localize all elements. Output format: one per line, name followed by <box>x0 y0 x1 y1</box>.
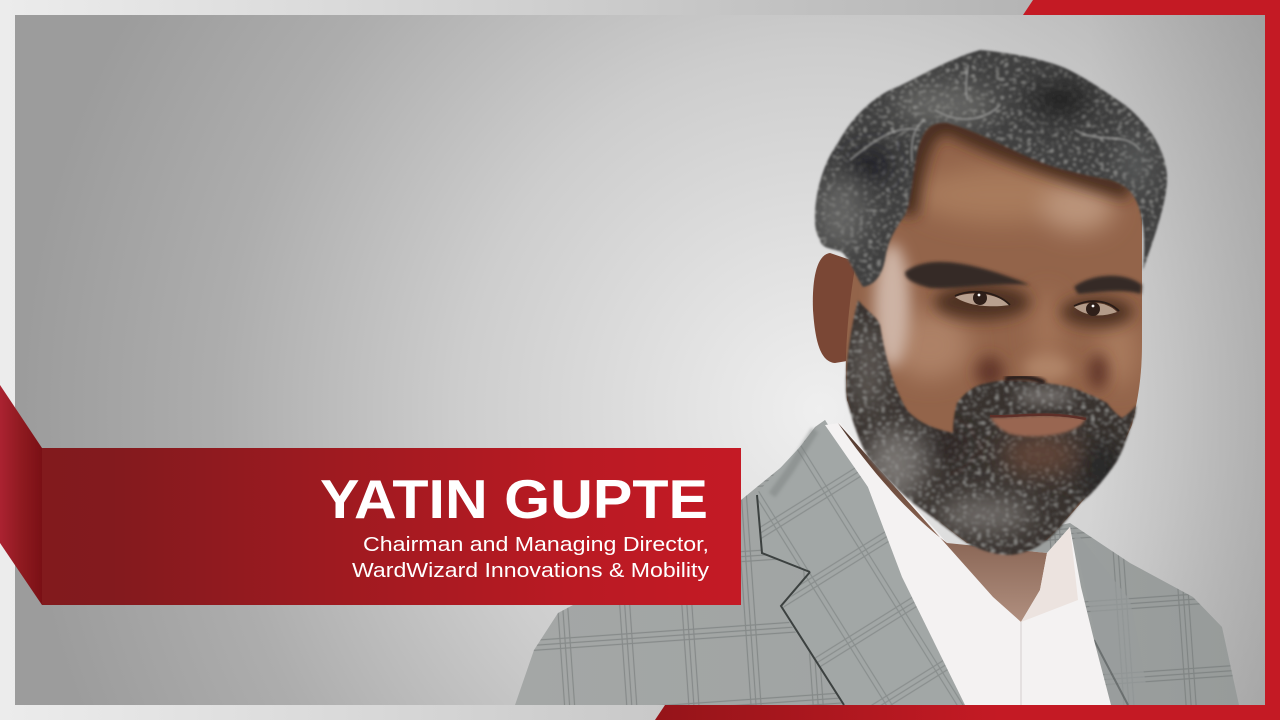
eyes <box>955 291 1119 316</box>
white shirt <box>825 423 1111 705</box>
name: YATIN GUPTE <box>320 468 708 530</box>
job title: Chairman and Managing Director, <box>363 533 709 556</box>
company: WardWizard Innovations & Mobility <box>352 559 710 582</box>
lips <box>990 377 1086 436</box>
eyebrows <box>905 262 1142 294</box>
hair <box>814 48 1168 288</box>
red frame accents <box>655 0 1280 720</box>
ear <box>813 253 880 363</box>
red banner <box>42 448 741 605</box>
face <box>846 121 1142 543</box>
red banner fold <box>0 385 42 605</box>
portrait of man in grey check suit <box>515 40 1239 705</box>
beard and moustache <box>844 300 1138 556</box>
suit jacket <box>515 420 1239 705</box>
